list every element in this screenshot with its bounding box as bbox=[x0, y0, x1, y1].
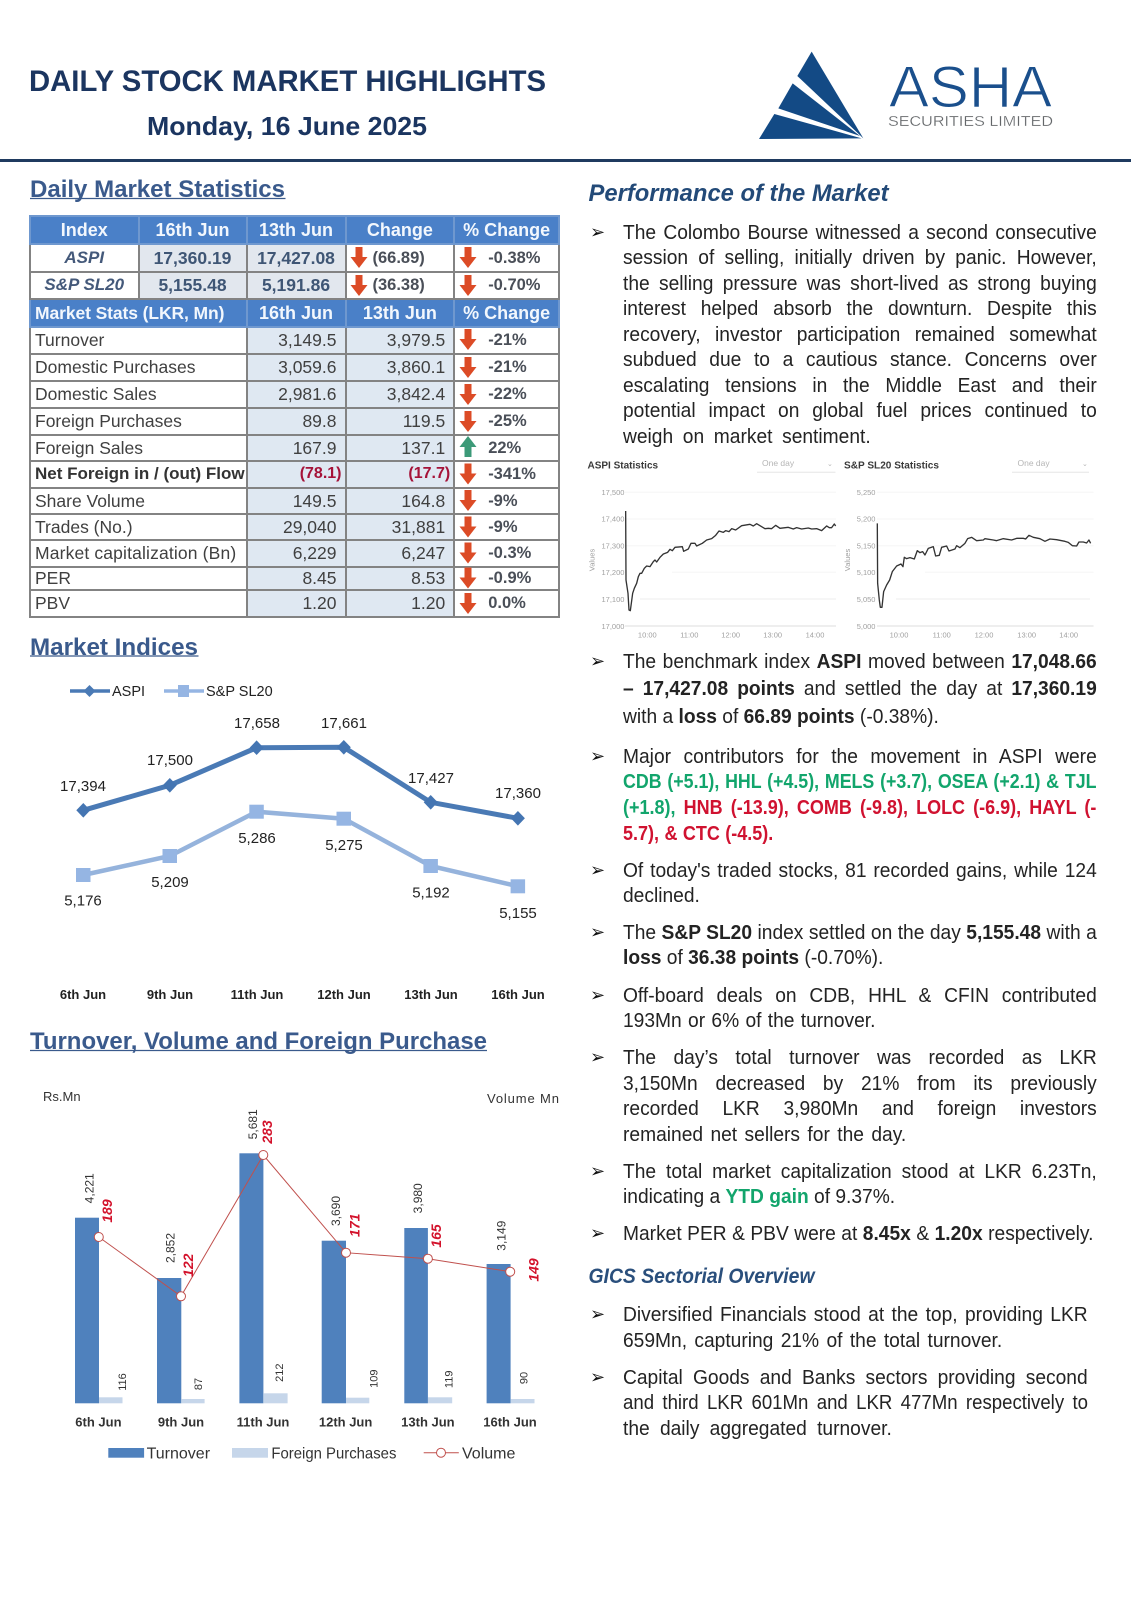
panel: market statistics table: 3,149.5 bbox=[278, 330, 336, 350]
text block: market overview bullet: interest helped absorb the downturn. Despite this bbox=[623, 298, 1097, 320]
text block: S&P SL20 bullet: ➢ bbox=[590, 922, 605, 943]
panel: market statistics table: Turnover bbox=[35, 330, 104, 350]
panel: market statistics table: 8.53 bbox=[411, 568, 445, 588]
panel: market statistics table: -341% bbox=[488, 465, 536, 483]
panel: market statistics table: -0.38% bbox=[488, 249, 540, 267]
axis labels: 11:00 bbox=[933, 630, 951, 640]
text block: PER and PBV bullet: ➢ bbox=[590, 1223, 605, 1244]
panel: market statistics table: (36.38) bbox=[372, 276, 425, 294]
text block: market overview bullet bbox=[590, 222, 1097, 448]
axis labels: 12:00 bbox=[975, 630, 993, 640]
data labels: 17,427 bbox=[408, 770, 454, 787]
panel: market statistics table: Foreign Purchases bbox=[35, 411, 182, 431]
volume value labels: 171 bbox=[346, 1213, 362, 1237]
x-axis labels: 12th Jun bbox=[317, 987, 371, 1002]
text block: traded stocks bullet: Of today's traded stocks, 81 recorded gains, while 124 bbox=[623, 860, 1097, 882]
intraday index lines bbox=[626, 511, 1091, 611]
panel: market statistics table: 1.20 bbox=[411, 593, 445, 613]
text block: market overview bullet: recovery, investor participation remained somewhat bbox=[623, 324, 1097, 346]
axis labels: 13:00 bbox=[1017, 630, 1036, 640]
heading: Daily Market Statistics: Daily Market Statistics bbox=[30, 176, 285, 203]
text block: ASPI movement bullet: The benchmark index ASPI moved between 17,048.66 bbox=[623, 651, 1097, 673]
bar chart: turnover, foreign purchases, volume bbox=[43, 1089, 559, 1462]
panel: market statistics table: -0.70% bbox=[488, 276, 540, 294]
text block: S&P SL20 bullet: The S&P SL20 index settled on the day 5,155.48 with a bbox=[623, 922, 1097, 944]
gridlines bbox=[625, 492, 1094, 626]
text block: major contributors bullet: CDB (+5.1), HHL (+4.5), MELS (+3.7), OSEA (+2.1) & TJL bbox=[623, 771, 1096, 793]
axis labels: 5,200 bbox=[857, 515, 875, 524]
panel: market statistics table: 17,427.08 bbox=[257, 248, 335, 268]
panel: market statistics table: 3,860.1 bbox=[387, 357, 445, 377]
panel: market statistics table: % Change bbox=[463, 220, 550, 240]
range selectors bbox=[757, 458, 1089, 472]
panel: market statistics table: 3,842.4 bbox=[387, 384, 445, 404]
panel: market statistics table: (78.1) bbox=[300, 465, 342, 482]
panel: market statistics table: 1.20 bbox=[302, 593, 336, 613]
legend: indices bbox=[70, 684, 273, 700]
axis labels: 17,100 bbox=[602, 595, 624, 604]
text block: capital goods and banks bullet bbox=[590, 1367, 1088, 1440]
turnover value labels: 4,221 bbox=[82, 1173, 96, 1203]
panel: market statistics table: -9% bbox=[488, 492, 518, 510]
panel: market statistics table: 22% bbox=[488, 439, 521, 457]
foreign purchase bars bbox=[99, 1393, 534, 1403]
foreign purchase value labels bbox=[117, 1364, 530, 1391]
panel: market statistics table: 3,979.5 bbox=[387, 330, 445, 350]
turnover value labels: 3,980 bbox=[411, 1183, 425, 1213]
text block: off-board deals bullet: 193Mn or 6% of the turnover. bbox=[623, 1010, 875, 1032]
text block: major contributors bullet: 5.7), & CTC (-4.5). bbox=[623, 823, 773, 845]
heading: GICS Sectorial Overview: GICS Sectorial Overview bbox=[588, 1265, 816, 1288]
panel: market statistics table: 13th Jun bbox=[363, 303, 437, 323]
text block: major contributors bullet: Major contributors for the movement in ASPI were bbox=[623, 746, 1097, 768]
turnover value labels: 5,681 bbox=[246, 1109, 260, 1139]
text block: ASPI movement bullet: with a loss of 66.89 points (-0.38%). bbox=[623, 706, 939, 728]
axis labels: 17,400 bbox=[602, 515, 624, 524]
volume value labels bbox=[99, 1120, 542, 1282]
text block: major contributors bullet: (+1.8), HNB (-13.9), COMB (-9.8), LOLC (-6.9), HAYL (- bbox=[623, 797, 1096, 819]
text block: capital goods and banks bullet: Capital Goods and Banks sectors providing second bbox=[623, 1367, 1088, 1389]
panel: market statistics table: -22% bbox=[488, 385, 527, 403]
volume value labels: 189 bbox=[99, 1199, 115, 1223]
panel: market statistics table: Change bbox=[367, 220, 433, 240]
data labels bbox=[60, 715, 541, 922]
heading: Performance of the Market: Performance of the Market bbox=[588, 180, 889, 207]
panel: market statistics table: Share Volume bbox=[35, 491, 145, 511]
axis labels: 5,250 bbox=[857, 488, 875, 497]
x-axis labels: 6th Jun bbox=[60, 987, 106, 1002]
panel: market statistics table: -9% bbox=[488, 518, 518, 536]
panel: market statistics table: 13th Jun bbox=[259, 220, 333, 240]
x-axis labels: 6th Jun bbox=[75, 1414, 122, 1430]
text block: diversified financials bullet bbox=[590, 1304, 1088, 1352]
axis titles: Volume Mn bbox=[487, 1091, 559, 1106]
text block: ASPI movement bullet: – 17,427.08 points and settled the day at 17,360.19 bbox=[623, 678, 1097, 700]
text block: market overview bullet: escalating tensions in the Middle East and their bbox=[623, 375, 1097, 397]
text block: market capitalization bullet: ➢ bbox=[590, 1161, 605, 1182]
panel: market statistics table: 164.8 bbox=[401, 491, 445, 511]
series: S&P SL20 bbox=[76, 805, 525, 893]
range selectors: One day bbox=[762, 458, 795, 468]
legend: Volume bbox=[462, 1446, 515, 1462]
x-axis labels: 9th Jun bbox=[158, 1414, 204, 1430]
heading: Turnover, Volume and Foreign Purchase: Turnover, Volume and Foreign Purchase bbox=[30, 1028, 487, 1055]
text block: major contributors bullet: ➢ bbox=[590, 746, 605, 767]
x-axis labels bbox=[60, 987, 545, 1002]
text block: diversified financials bullet: 659Mn, capturing 21% of the total turnover. bbox=[623, 1330, 1002, 1352]
text block: traded stocks bullet: declined. bbox=[623, 885, 700, 907]
x-axis labels: 11th Jun bbox=[237, 1414, 289, 1430]
panel: market statistics table: (17.7) bbox=[408, 465, 450, 482]
data labels: 5,155 bbox=[499, 905, 537, 922]
text block: capital goods and banks bullet: ➢ bbox=[590, 1367, 605, 1388]
foreign purchase value labels: 87 bbox=[193, 1378, 205, 1390]
panel: market statistics table: Market Stats (LKR, Mn) bbox=[35, 303, 224, 323]
foreign purchase value labels: 212 bbox=[274, 1364, 286, 1382]
panel: market statistics table: 8.45 bbox=[302, 568, 336, 588]
text block: capital goods and banks bullet: the daily aggregated turnover. bbox=[623, 1418, 892, 1440]
axis labels: 11:00 bbox=[680, 630, 698, 640]
volume line bbox=[94, 1150, 515, 1301]
x-axis labels: 12th Jun bbox=[319, 1414, 372, 1430]
panel: market statistics table: 119.5 bbox=[403, 411, 445, 431]
axis labels: 17,000 bbox=[602, 622, 624, 631]
data labels: 5,209 bbox=[151, 874, 189, 891]
date subtitle: Monday, 16 June 2025 bbox=[147, 111, 427, 141]
text block: market capitalization bullet bbox=[590, 1161, 1097, 1208]
panel: market statistics table: Index bbox=[61, 220, 108, 240]
panel: market statistics table: 6,229 bbox=[293, 543, 336, 563]
x-axis labels: 11th Jun bbox=[231, 987, 283, 1002]
range selectors: One day bbox=[1018, 458, 1050, 468]
axis labels: 13:00 bbox=[763, 630, 782, 640]
text block: turnover bullet: remained net sellers for the day. bbox=[623, 1124, 906, 1146]
text block: S&P SL20 bullet: loss of 36.38 points (-0.70%). bbox=[623, 947, 883, 969]
text block: ASPI movement bullet bbox=[590, 651, 1097, 728]
data labels: 17,394 bbox=[60, 778, 106, 795]
panel: market statistics table: (66.89) bbox=[372, 249, 425, 267]
line chart: ASPI and S&P SL20 bbox=[60, 684, 545, 1002]
logo: Asha Securities Limited: SECURITIES LIMITED bbox=[888, 113, 1053, 130]
axis labels: 5,150 bbox=[857, 542, 875, 550]
header rule bbox=[0, 159, 1131, 162]
range selectors: ⌄ bbox=[1082, 461, 1088, 468]
axis labels: 17,200 bbox=[602, 568, 624, 577]
data labels: 5,286 bbox=[238, 830, 276, 847]
foreign purchase value labels: 119 bbox=[444, 1371, 456, 1388]
legend: Turnover bbox=[147, 1446, 211, 1462]
panel: market statistics table: 16th Jun bbox=[155, 220, 230, 240]
data labels: 5,176 bbox=[64, 892, 102, 910]
panel: market statistics table: % Change bbox=[463, 303, 550, 323]
panel: market statistics table: 17,360.19 bbox=[154, 248, 231, 268]
text block: market overview bullet: potential impact on global fuel prices continued to bbox=[623, 400, 1097, 422]
volume value labels: 283 bbox=[259, 1120, 275, 1145]
panel: market statistics table: -0.9% bbox=[488, 569, 531, 587]
text block: market overview bullet: subdued due to a cautious stance. Concerns over bbox=[623, 349, 1097, 371]
panel: market statistics table: 31,881 bbox=[392, 517, 445, 537]
axis labels: 10:00 bbox=[638, 630, 657, 640]
chart headings bbox=[588, 460, 939, 472]
text block: off-board deals bullet: ➢ bbox=[590, 985, 605, 1006]
panel: market statistics table: 137.1 bbox=[401, 438, 445, 458]
text block: major contributors bullet bbox=[590, 746, 1097, 845]
panel: market statistics table: 5,155.48 bbox=[158, 275, 227, 295]
x-axis labels: 13th Jun bbox=[401, 1414, 455, 1430]
panel: market statistics table: Domestic Purchases bbox=[35, 357, 195, 377]
turnover value labels bbox=[82, 1109, 508, 1263]
panel: market statistics table: -21% bbox=[488, 331, 527, 349]
text block: off-board deals bullet: Off-board deals on CDB, HHL & CFIN contributed bbox=[623, 985, 1097, 1007]
panel: market statistics table: Foreign Sales bbox=[35, 438, 143, 458]
text block: PER and PBV bullet: Market PER & PBV were at 8.45x & 1.20x respectively. bbox=[623, 1223, 1093, 1245]
text block: turnover bullet: recorded LKR 3,980Mn and foreign investors bbox=[623, 1098, 1097, 1120]
text block: market capitalization bullet: indicating a YTD gain of 9.37%. bbox=[623, 1186, 895, 1208]
panel: market statistics table: Net Foreign in / (out) Flow bbox=[35, 464, 245, 483]
text block: market overview bullet: ➢ bbox=[590, 222, 605, 243]
data labels: 5,275 bbox=[325, 837, 363, 854]
text block: diversified financials bullet: Diversified Financials stood at the top, providing LKR bbox=[623, 1304, 1088, 1326]
data labels: 17,658 bbox=[234, 715, 280, 732]
text block: market overview bullet: The Colombo Bourse witnessed a second consecutive bbox=[623, 222, 1097, 244]
data labels: 17,500 bbox=[147, 752, 193, 769]
legend: indices: ASPI bbox=[112, 684, 145, 700]
panel: market statistics table: 29,040 bbox=[283, 517, 336, 537]
range selectors: ⌄ bbox=[827, 461, 833, 468]
panel: market statistics table: 2,981.6 bbox=[278, 384, 336, 404]
volume value labels: 149 bbox=[526, 1258, 542, 1282]
text block: market overview bullet: weigh on market sentiment. bbox=[623, 426, 871, 448]
axis labels: 12:00 bbox=[721, 630, 740, 640]
axis labels: 14:00 bbox=[1059, 630, 1078, 640]
text block: market overview bullet: session of selling, initially driven by panic. However, bbox=[623, 247, 1097, 269]
text block: traded stocks bullet bbox=[590, 860, 1097, 907]
heading: Market Indices: Market Indices bbox=[30, 634, 198, 661]
volume value labels: 165 bbox=[428, 1224, 444, 1248]
text block: ASPI movement bullet: ➢ bbox=[590, 651, 605, 672]
panel: market statistics table: -21% bbox=[488, 358, 527, 376]
text block: traded stocks bullet: ➢ bbox=[590, 860, 605, 881]
logo: Asha Securities Limited: ASHA bbox=[889, 55, 1052, 120]
icons: change arrows bbox=[350, 247, 476, 614]
panel: market statistics table: 0.0% bbox=[488, 594, 526, 612]
series: ASPI bbox=[76, 740, 525, 826]
turnover value labels: 3,690 bbox=[329, 1196, 343, 1226]
foreign purchase value labels: 109 bbox=[368, 1370, 380, 1388]
panel: market statistics table: 3,059.6 bbox=[278, 357, 336, 377]
text block: turnover bullet: ➢ bbox=[590, 1047, 605, 1068]
panel: market statistics table: 167.9 bbox=[293, 438, 336, 458]
axis labels: 17,500 bbox=[602, 488, 624, 497]
panel: market statistics table: Trades (No.) bbox=[35, 517, 133, 537]
turnover value labels: 3,149 bbox=[494, 1220, 508, 1251]
turnover bars bbox=[75, 1153, 511, 1403]
panel: market statistics table: PER bbox=[35, 568, 71, 588]
panel: market statistics table: 6,247 bbox=[401, 543, 445, 563]
text block: turnover bullet bbox=[590, 1047, 1097, 1146]
text block: market capitalization bullet: The total market capitalization stood at LKR 6.23Tn, bbox=[623, 1161, 1097, 1183]
text block: capital goods and banks bullet: and third LKR 601Mn and LKR 477Mn respectively to bbox=[623, 1392, 1088, 1414]
x-axis labels bbox=[75, 1414, 537, 1430]
panel: market statistics table: -25% bbox=[488, 412, 527, 430]
legend bbox=[108, 1446, 515, 1462]
chart headings: S&P SL20 Statistics bbox=[844, 460, 939, 472]
chart headings: ASPI Statistics bbox=[588, 460, 659, 472]
data labels: 5,192 bbox=[412, 884, 450, 902]
panel: market statistics table: -0.3% bbox=[488, 544, 531, 562]
axis labels: 10:00 bbox=[890, 630, 908, 640]
data labels: 17,360 bbox=[495, 785, 541, 802]
axis labels: 5,050 bbox=[857, 595, 875, 604]
x-axis labels: 16th Jun bbox=[483, 1414, 537, 1430]
axis labels: 14:00 bbox=[806, 630, 824, 640]
axis labels: 5,000 bbox=[857, 622, 875, 631]
axis titles: Rs.Mn bbox=[43, 1089, 81, 1104]
legend: indices: S&P SL20 bbox=[206, 684, 273, 700]
panel: market statistics table: 89.8 bbox=[302, 411, 336, 431]
text block: turnover bullet: The day’s total turnover was recorded as LKR bbox=[623, 1047, 1097, 1069]
panel: market statistics table: S&P SL20 bbox=[44, 275, 124, 294]
panel: market statistics table: PBV bbox=[35, 593, 70, 613]
x-axis labels: 13th Jun bbox=[404, 987, 458, 1002]
title: DAILY STOCK MARKET HIGHLIGHTS bbox=[29, 65, 546, 98]
axis labels: Values bbox=[843, 549, 852, 571]
panel: market statistics table: 5,191.86 bbox=[262, 275, 330, 295]
axis labels: 17,300 bbox=[602, 542, 624, 550]
panel: market statistics table: Market capitalization (Bn) bbox=[35, 543, 236, 563]
axis titles bbox=[43, 1089, 559, 1106]
panel: market statistics table: Domestic Sales bbox=[35, 384, 157, 404]
legend: Foreign Purchases bbox=[271, 1446, 396, 1462]
charts: ASPI and S&P SL20 intraday statistics bbox=[588, 458, 1094, 640]
foreign purchase value labels: 90 bbox=[518, 1372, 530, 1384]
axis labels bbox=[588, 488, 1078, 640]
logo: Asha Securities Limited bbox=[759, 52, 1053, 139]
panel: market statistics table: 149.5 bbox=[293, 491, 336, 511]
text block: turnover bullet: 3,150Mn decreased by 21% from its previously bbox=[623, 1073, 1097, 1095]
x-axis labels: 9th Jun bbox=[147, 987, 193, 1002]
text block: diversified financials bullet: ➢ bbox=[590, 1304, 605, 1325]
x-axis labels: 16th Jun bbox=[491, 987, 545, 1002]
panel: market statistics table: 16th Jun bbox=[259, 303, 333, 323]
text block: off-board deals bullet bbox=[590, 985, 1097, 1032]
text block: market overview bullet: the selling pressure was short-lived as strong buying bbox=[623, 273, 1097, 295]
axis labels: Values bbox=[588, 549, 596, 571]
turnover value labels: 2,852 bbox=[164, 1233, 178, 1263]
volume value labels: 122 bbox=[180, 1253, 196, 1277]
panel: market statistics table: ASPI bbox=[64, 248, 104, 267]
data labels: 17,661 bbox=[321, 715, 367, 732]
text block: S&P SL20 bullet bbox=[590, 922, 1097, 969]
panel: market statistics table bbox=[29, 215, 560, 618]
axis labels: 5,100 bbox=[857, 568, 875, 577]
foreign purchase value labels: 116 bbox=[117, 1373, 129, 1391]
